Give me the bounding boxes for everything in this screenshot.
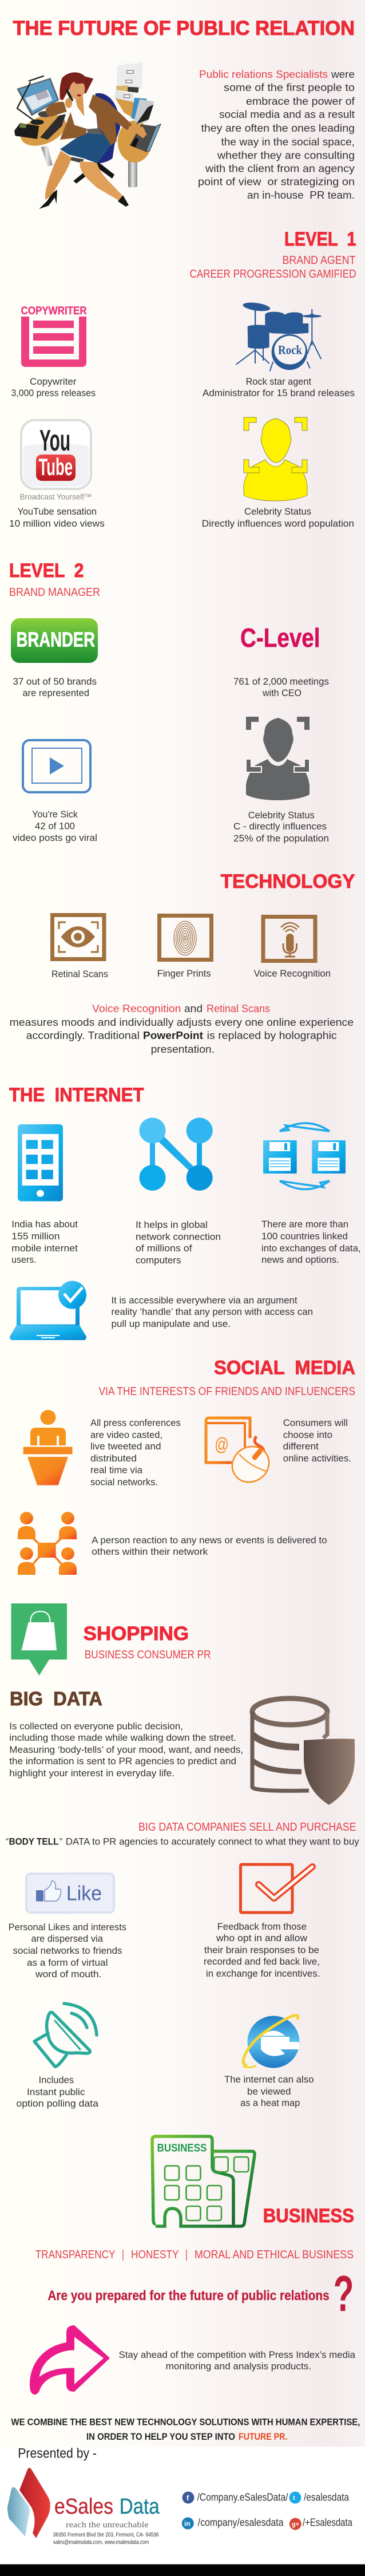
closing statement <box>11 2417 360 2442</box>
icon: like button: Like <box>66 1882 102 1905</box>
icon: pink arrow <box>30 2325 110 2395</box>
intro paragraph: social media and as a result <box>219 108 355 120</box>
caption: celebrity status: Celebrity Status <box>244 506 311 517</box>
intro paragraph: were <box>331 68 355 80</box>
caption: C-level celebrity status <box>233 809 329 844</box>
social links <box>182 2491 353 2530</box>
caption: press conferences: are video casted, <box>90 1429 162 1440</box>
text: accessible everywhere: reality ‘handle’ that any person with access can <box>111 1306 313 1317</box>
text: stay ahead <box>119 2349 356 2372</box>
heading: technology: TECHNOLOGY <box>221 871 355 892</box>
icon: YouTube: Broadcast Yourself™ <box>20 492 92 501</box>
caption: global network: network connection <box>136 1231 221 1242</box>
text: big data paragraph: including those made while walking down the street. <box>9 1732 236 1743</box>
caption: YouTube: YouTube sensation <box>17 506 97 517</box>
logo: eSales Data: reach the unreachable <box>66 2520 149 2530</box>
heading: shopping: BUSINESS CONSUMER PR <box>85 1649 211 1661</box>
icon: database with shield <box>252 1698 355 1805</box>
values line: | <box>185 2249 188 2261</box>
icon: grey celebrity silhouette <box>246 717 310 800</box>
caption: viral video <box>13 809 97 843</box>
heading: big data companies: DATA to PR agencies to accurately connect to what they want to buy <box>66 1836 359 1847</box>
caption: copywriter: 3,000 press releases <box>11 388 96 398</box>
heading: big data companies <box>6 1821 359 1847</box>
caption: feedback: recorded and fed back live, <box>204 1956 320 1967</box>
heading: social media <box>98 1357 355 1398</box>
icon: business building: BUSINESS <box>157 2143 207 2155</box>
caption: C-level celebrity status: Celebrity Status <box>248 809 315 820</box>
illustration: busy PR woman at desks <box>14 61 161 209</box>
text: stay ahead: monitoring and analysis products. <box>166 2361 311 2372</box>
icon: internet explorer <box>243 2016 300 2068</box>
icon: video player <box>23 740 90 792</box>
caption: countries linked: into exchanges of data, <box>261 1243 361 1254</box>
title: THE FUTURE OF PUBLIC RELATION <box>13 17 355 39</box>
caption: India mobile users: users. <box>11 1254 37 1265</box>
caption: heat map <box>224 2074 314 2108</box>
technology paragraph: Voice Recognition <box>92 1002 181 1014</box>
caption: instant polling: Includes <box>39 2075 74 2085</box>
technology paragraph: measures moods and individually adjusts every one online experience <box>10 1016 354 1028</box>
logo: eSales Data: eSales <box>54 2495 113 2519</box>
technology paragraph: and <box>184 1002 203 1014</box>
caption: press conferences: real time via <box>90 1464 143 1476</box>
caption: brands: are represented <box>23 688 89 698</box>
question callout <box>47 2265 354 2322</box>
icon: C-Level wordmark: C-Level <box>240 623 320 653</box>
caption: consumers <box>283 1417 351 1464</box>
caption: India mobile users: India has about <box>11 1219 78 1230</box>
intro paragraph: with the client from an agency <box>205 163 355 174</box>
caption: consumers: choose into <box>283 1429 332 1440</box>
caption: countries linked: news and options. <box>261 1254 339 1265</box>
icon: fingerprint <box>159 916 212 959</box>
text: person reaction: A person reaction to any news or events is delivered to <box>92 1535 327 1546</box>
icon: people network <box>18 1512 77 1575</box>
caption: personal likes: word of mouth. <box>35 1969 101 1980</box>
icon: mobile phone <box>18 1124 63 1201</box>
heading: level 2: LEVEL 2 <box>9 560 84 582</box>
caption: personal likes: are dispersed via <box>31 1933 104 1944</box>
caption: countries linked <box>261 1219 361 1265</box>
caption: instant polling: option polling data <box>16 2098 99 2109</box>
caption: press conferences: All press conferences <box>90 1417 181 1428</box>
caption: rock star agent: Administrator for 15 brand releases <box>203 388 355 398</box>
icon: email and mouse <box>206 1418 276 1490</box>
text: accessible everywhere <box>111 1295 313 1329</box>
icon: laptop with check badge <box>10 1281 86 1340</box>
logo: eSales Data: Data <box>120 2495 160 2519</box>
technology paragraph: Retinal Scans <box>207 1002 270 1014</box>
intro paragraph: an in-house PR team. <box>247 189 355 201</box>
caption: India mobile users: 155 million <box>11 1231 59 1242</box>
heading: big data companies: ” <box>59 1836 62 1847</box>
caption: countries linked: 100 countries linked <box>261 1231 348 1242</box>
closing statement: FUTURE PR. <box>239 2431 287 2442</box>
text: person reaction: others within their network <box>92 1546 208 1557</box>
logo: eSales Data: sales@esalesdata.com, www.esalesdata.com <box>53 2539 149 2546</box>
caption: heat map: be viewed <box>247 2086 291 2097</box>
technology paragraph: accordingly. Traditional <box>26 1029 140 1041</box>
logo: eSales Data <box>7 2468 160 2546</box>
caption: rock star agent: Rock star agent <box>246 376 311 387</box>
technology paragraph: presentation. <box>151 1043 215 1055</box>
text: big data paragraph: Measuring ‘body-tells’ of your mood, want, and needs, <box>9 1744 243 1755</box>
caption: India mobile users <box>11 1219 78 1265</box>
caption: brands <box>13 676 97 698</box>
intro paragraph: whether they are consulting <box>217 149 355 161</box>
caption: feedback: who opt in and allow <box>216 1933 308 1943</box>
presented by label: Presented by - <box>18 2445 97 2462</box>
caption: C-level celebrity status: 25% of the population <box>233 833 329 844</box>
icon: polling megaphone <box>34 2004 97 2067</box>
icon: retinal scan <box>53 915 104 959</box>
text: accessible everywhere: It is accessible everywhere via an argument <box>111 1295 297 1306</box>
heading: level 2: BRAND MANAGER <box>9 586 100 599</box>
icon: yellow celebrity silhouette <box>244 417 307 501</box>
icon: YouTube: You <box>39 424 70 457</box>
caption: meetings <box>233 676 329 698</box>
icon: shopping bag pin <box>11 1603 67 1676</box>
icon: brander badge <box>11 618 98 663</box>
intro paragraph: embrace the power of <box>246 95 355 107</box>
technology paragraph: PowerPoint <box>143 1029 203 1041</box>
social links: t <box>293 2495 295 2502</box>
caption: YouTube: 10 million video views <box>9 518 105 529</box>
icon: YouTube <box>20 420 92 501</box>
icon: like button <box>26 1874 114 1913</box>
caption: viral video: video posts go viral <box>13 832 97 843</box>
caption: global network <box>136 1219 221 1266</box>
heading: shopping: SHOPPING <box>84 1623 189 1645</box>
heading: social media: SOCIAL MEDIA <box>214 1357 355 1379</box>
caption: personal likes: social networks to friends <box>13 1945 122 1956</box>
text: big data paragraph: Is collected on everyone public decision, <box>9 1721 183 1732</box>
icon: business building <box>152 2136 255 2226</box>
technology paragraph: is replaced by holographic <box>207 1029 337 1041</box>
caption: heat map: as a heat map <box>240 2097 300 2108</box>
icon: floppy disks exchange <box>263 1123 346 1190</box>
caption: rock star agent <box>203 376 355 398</box>
caption: viral video: You're Sick <box>32 809 78 820</box>
caption: heat map: The internet can also <box>224 2074 314 2085</box>
values line: HONESTY <box>131 2249 178 2261</box>
heading: business: BUSINESS <box>263 2205 354 2227</box>
caption: consumers: Consumers will <box>283 1417 348 1428</box>
caption: celebrity status: Directly influences word population <box>202 518 354 529</box>
intro paragraph: Public relations Specialists <box>199 68 328 80</box>
caption: press conferences: live tweeted and <box>90 1441 161 1452</box>
caption: copywriter: Copywriter <box>30 376 77 387</box>
text: accessible everywhere: pull up manipulate and use. <box>111 1318 231 1329</box>
caption: technology icons: Finger Prints <box>157 968 211 979</box>
social links: in <box>184 2520 191 2528</box>
heading: level 1 <box>190 228 356 280</box>
caption: feedback: Feedback from those <box>217 1921 307 1932</box>
icon: YouTube: Tube <box>39 453 73 480</box>
text: big data paragraph: highlight your interest in everyday life. <box>9 1768 174 1779</box>
caption: instant polling <box>16 2075 99 2109</box>
caption: meetings: with CEO <box>262 688 301 698</box>
question callout: Are you prepared for the future of public relations <box>47 2288 330 2304</box>
caption: personal likes <box>9 1922 126 1980</box>
social links: /+Esalesdata <box>303 2517 353 2528</box>
heading: big data: BIG DATA <box>10 1688 102 1710</box>
values line <box>35 2249 354 2261</box>
intro paragraph <box>198 68 355 201</box>
caption: personal likes: Personal Likes and interests <box>9 1922 126 1933</box>
icon: rock drum kit: Rock <box>278 343 303 357</box>
icon: email and mouse: @ <box>215 1434 229 1455</box>
caption: viral video: 42 of 100 <box>35 821 75 832</box>
caption: consumers: different <box>283 1441 319 1452</box>
icon: rock drum kit <box>236 301 322 371</box>
social links: f <box>187 2494 189 2502</box>
heading: big data companies: BODY TELL <box>9 1836 58 1847</box>
caption: global network: computers <box>136 1255 181 1266</box>
question callout: ? <box>334 2265 354 2322</box>
social links: /esalesdata <box>304 2492 350 2503</box>
caption: celebrity status <box>202 506 354 529</box>
footer bar <box>0 2565 365 2576</box>
caption: meetings: 761 of 2,000 meetings <box>233 676 329 687</box>
caption: press conferences: social networks. <box>90 1477 158 1487</box>
logo: eSales Data: 38350 Fremont Blvd Ste 203, Fremont, CA- 94536 <box>53 2532 159 2538</box>
intro paragraph: point of view or strategizing on <box>198 175 355 188</box>
caption: consumers: online activities. <box>283 1453 351 1464</box>
caption: press conferences <box>90 1417 181 1487</box>
caption: press conferences: distributed <box>90 1453 137 1464</box>
text: stay ahead: Stay ahead of the competition with Press Index’s media <box>119 2349 356 2360</box>
caption: C-level celebrity status: C - directly influences <box>233 821 327 832</box>
caption: technology icons: Retinal Scans <box>51 969 108 979</box>
icon: podium speaker <box>23 1410 73 1485</box>
heading: shopping <box>84 1623 211 1661</box>
social links: g+ <box>292 2521 299 2528</box>
caption: technology icons: Voice Recognition <box>254 968 331 979</box>
heading: big data companies: “ <box>6 1836 9 1847</box>
icon: copywriter <box>21 305 87 367</box>
text: person reaction <box>92 1535 327 1557</box>
caption: YouTube <box>9 506 105 529</box>
closing statement: IN ORDER TO HELP YOU STEP INTO <box>86 2431 235 2442</box>
intro paragraph: they are often the ones leading <box>201 122 355 134</box>
icon: brander badge: BRANDER <box>16 627 95 651</box>
text: big data paragraph: the information is sent to PR agencies to predict and <box>9 1756 236 1767</box>
icon: network N <box>140 1117 213 1191</box>
values line: TRANSPARENCY <box>35 2249 115 2261</box>
caption: feedback: in exchange for incentives. <box>206 1968 320 1979</box>
values line: | <box>122 2249 124 2261</box>
caption: global network: It helps in global <box>136 1219 208 1230</box>
caption: countries linked: There are more than <box>261 1219 348 1230</box>
caption: technology icons <box>51 968 331 979</box>
caption: personal likes: as a form of virtual <box>27 1957 108 1968</box>
icon: feedback checkbox <box>240 1864 312 1913</box>
heading: level 1: BRAND AGENT <box>283 254 356 267</box>
technology paragraph <box>10 1002 354 1055</box>
heading: the internet: THE INTERNET <box>9 1084 144 1106</box>
caption: brands: 37 out of 50 brands <box>13 676 97 687</box>
caption: global network: of millions of <box>136 1243 192 1254</box>
social links: /company/esalesdata <box>198 2517 284 2528</box>
heading: level 2 <box>9 560 100 599</box>
caption: feedback <box>204 1921 320 1979</box>
caption: India mobile users: mobile internet <box>11 1243 78 1254</box>
intro paragraph: some of the first people to <box>224 81 355 93</box>
social links: /Company.eSalesData/ <box>197 2492 288 2503</box>
icon: copywriter: COPYWRITER <box>21 305 87 317</box>
caption: feedback: their brain responses to be <box>204 1945 319 1955</box>
text: big data paragraph <box>9 1721 243 1779</box>
caption: instant polling: Instant public <box>27 2087 85 2097</box>
intro paragraph: the way in the social space, <box>221 136 355 148</box>
icon: voice recognition <box>263 917 315 961</box>
caption: copywriter <box>11 376 96 398</box>
